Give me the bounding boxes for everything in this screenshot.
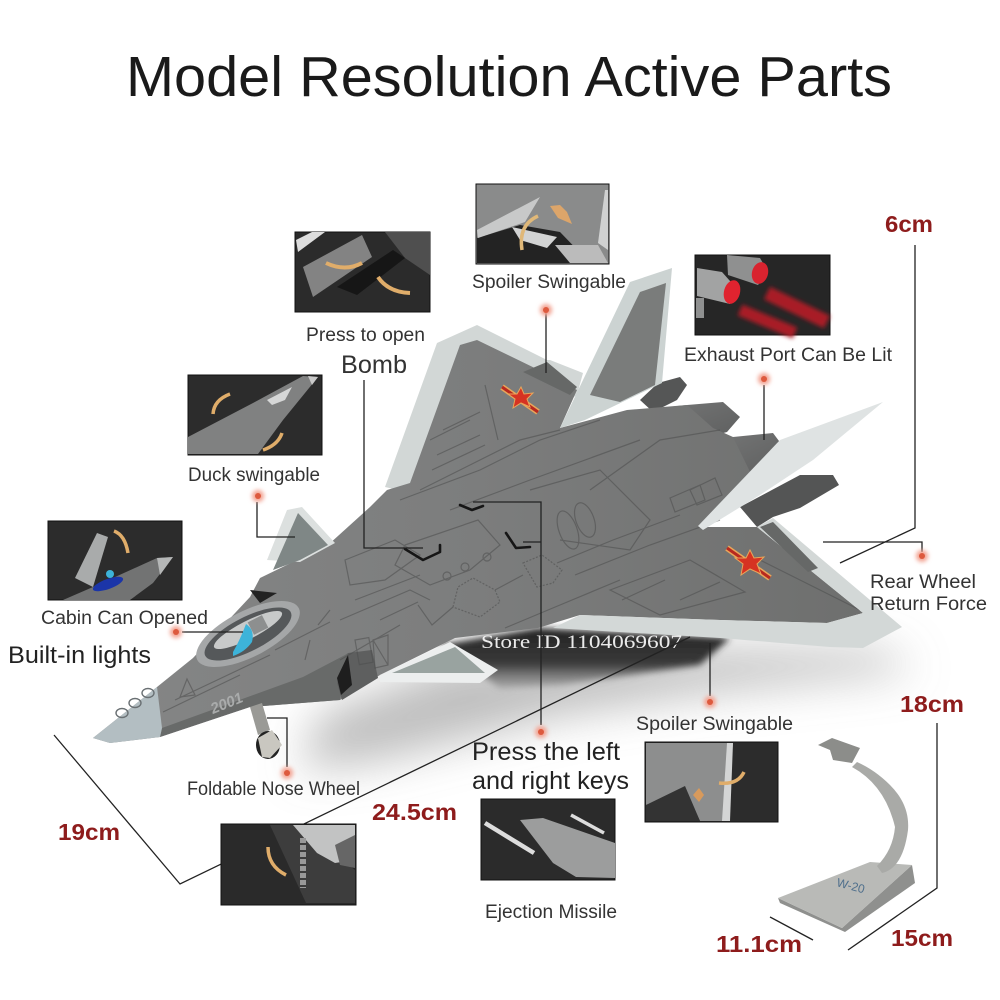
intake slot (337, 650, 378, 700)
feature labels: Exhaust Port Can Be Lit (684, 345, 893, 366)
photo: nose wheel (221, 824, 356, 905)
nose wheel (250, 703, 282, 759)
feature labels: Press to open (306, 325, 425, 346)
dimension labels: 19cm (58, 819, 120, 845)
feature labels: Spoiler Swingable (472, 272, 626, 293)
feature labels (8, 272, 987, 923)
dimension labels: 6cm (885, 211, 933, 237)
near wing light edge (553, 518, 902, 648)
callout dots (170, 304, 928, 779)
nose cone (93, 687, 162, 743)
feature labels: Ejection Missile (485, 902, 617, 923)
dimension labels: 18cm (900, 691, 964, 717)
exhaust nozzles (640, 402, 788, 480)
title: Model Resolution Active Parts (126, 45, 892, 109)
red insignia near wing (727, 548, 770, 578)
hull number: 2001 (207, 689, 245, 718)
display stand: W-20 (835, 875, 867, 896)
far wing light edge (385, 325, 583, 495)
under-wing dark shadow (440, 628, 730, 688)
near spoiler strip (760, 522, 818, 572)
feature labels: Rear Wheel (870, 572, 976, 593)
far tail fin (560, 268, 672, 428)
feature labels: Duck swingable (188, 465, 320, 486)
nose circles (116, 688, 154, 718)
leader lines (182, 245, 922, 767)
panel lines (163, 385, 860, 712)
dimension lines (54, 637, 937, 950)
ventral strake (380, 642, 498, 683)
near fin underside (740, 475, 839, 527)
feature labels: and right keys (472, 767, 629, 795)
photo: spoiler (476, 184, 609, 264)
red insignia far wing (502, 387, 538, 412)
tail fairing (640, 377, 687, 412)
photo: cabin (48, 521, 182, 600)
aircraft model (93, 268, 915, 770)
far spoiler strip (523, 362, 577, 395)
upper intake (250, 590, 277, 603)
canopy (187, 588, 309, 680)
dimension labels: 24.5cm (372, 799, 457, 825)
feature labels: Built-in lights (8, 642, 151, 669)
photo: missile (481, 799, 615, 880)
fuselage and main wings (93, 340, 863, 743)
photo: exhaust (695, 255, 830, 335)
watermark: Store ID 1104069607 (481, 632, 682, 653)
photo: rear spoiler (645, 742, 778, 822)
feature labels: Foldable Nose Wheel (187, 779, 360, 800)
ground shadow (300, 650, 915, 770)
display stand (778, 738, 915, 932)
dimension labels: 15cm (891, 925, 953, 951)
feature labels: Press the left (472, 738, 620, 766)
feature labels: Bomb (341, 351, 407, 379)
canard (267, 507, 335, 570)
photo: canard (188, 375, 322, 455)
feature labels: Cabin Can Opened (41, 608, 208, 629)
bomb bay marks (405, 505, 530, 560)
feature labels: Return Force (870, 594, 987, 615)
near tail fin (698, 402, 883, 530)
photo: bomb bay (295, 232, 430, 312)
fuselage lower band (160, 653, 348, 737)
dimension labels: 11.1cm (716, 931, 802, 957)
dimension labels (58, 211, 964, 957)
feature labels: Spoiler Swingable (636, 714, 793, 735)
